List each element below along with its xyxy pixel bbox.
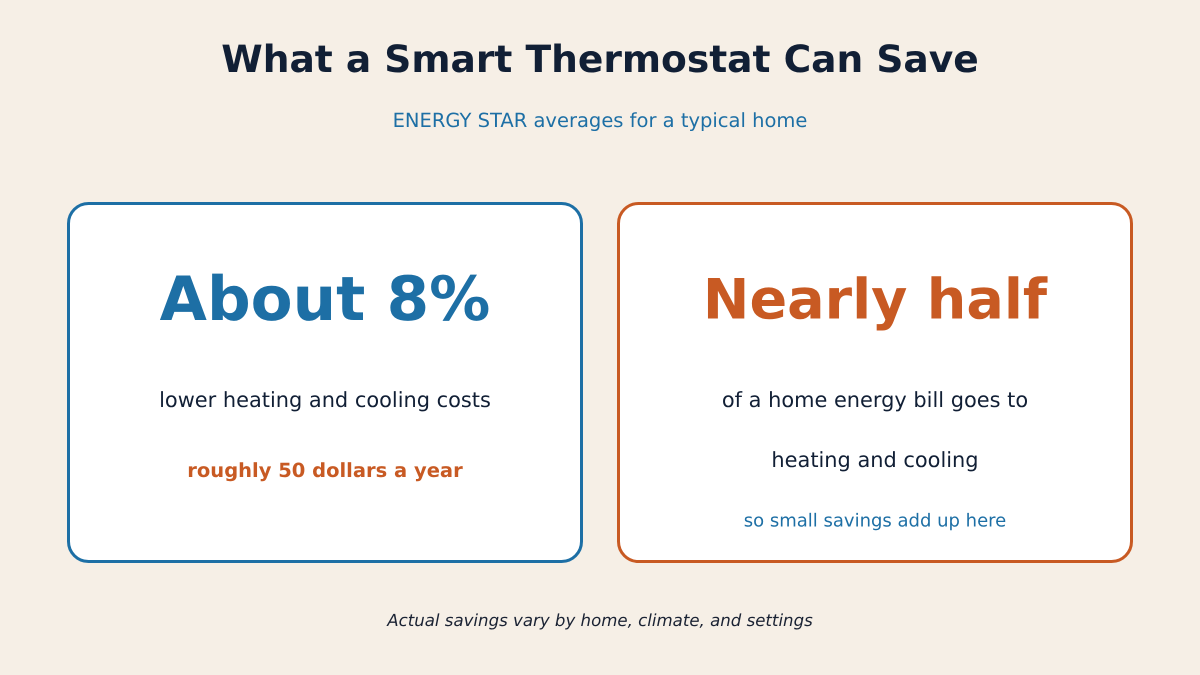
panel: nearly half [618,204,1132,562]
description: heating and cooling: heating and cooling [771,448,979,472]
big stat: about 8%: About 8% [160,264,490,335]
note: small savings: so small savings add up here [744,510,1006,532]
big stat: nearly half: Nearly half [703,268,1048,332]
panel: about 8 percent [68,204,582,562]
title: What a Smart Thermostat Can Save [221,37,979,81]
note: dollars a year: roughly 50 dollars a year [187,459,463,482]
subtitle: ENERGY STAR averages for a typical home [393,109,807,132]
footnote: Actual savings vary by home, climate, and settings [386,611,813,630]
description: energy bill: of a home energy bill goes to [722,388,1028,412]
description: lower costs: lower heating and cooling costs [159,388,491,412]
